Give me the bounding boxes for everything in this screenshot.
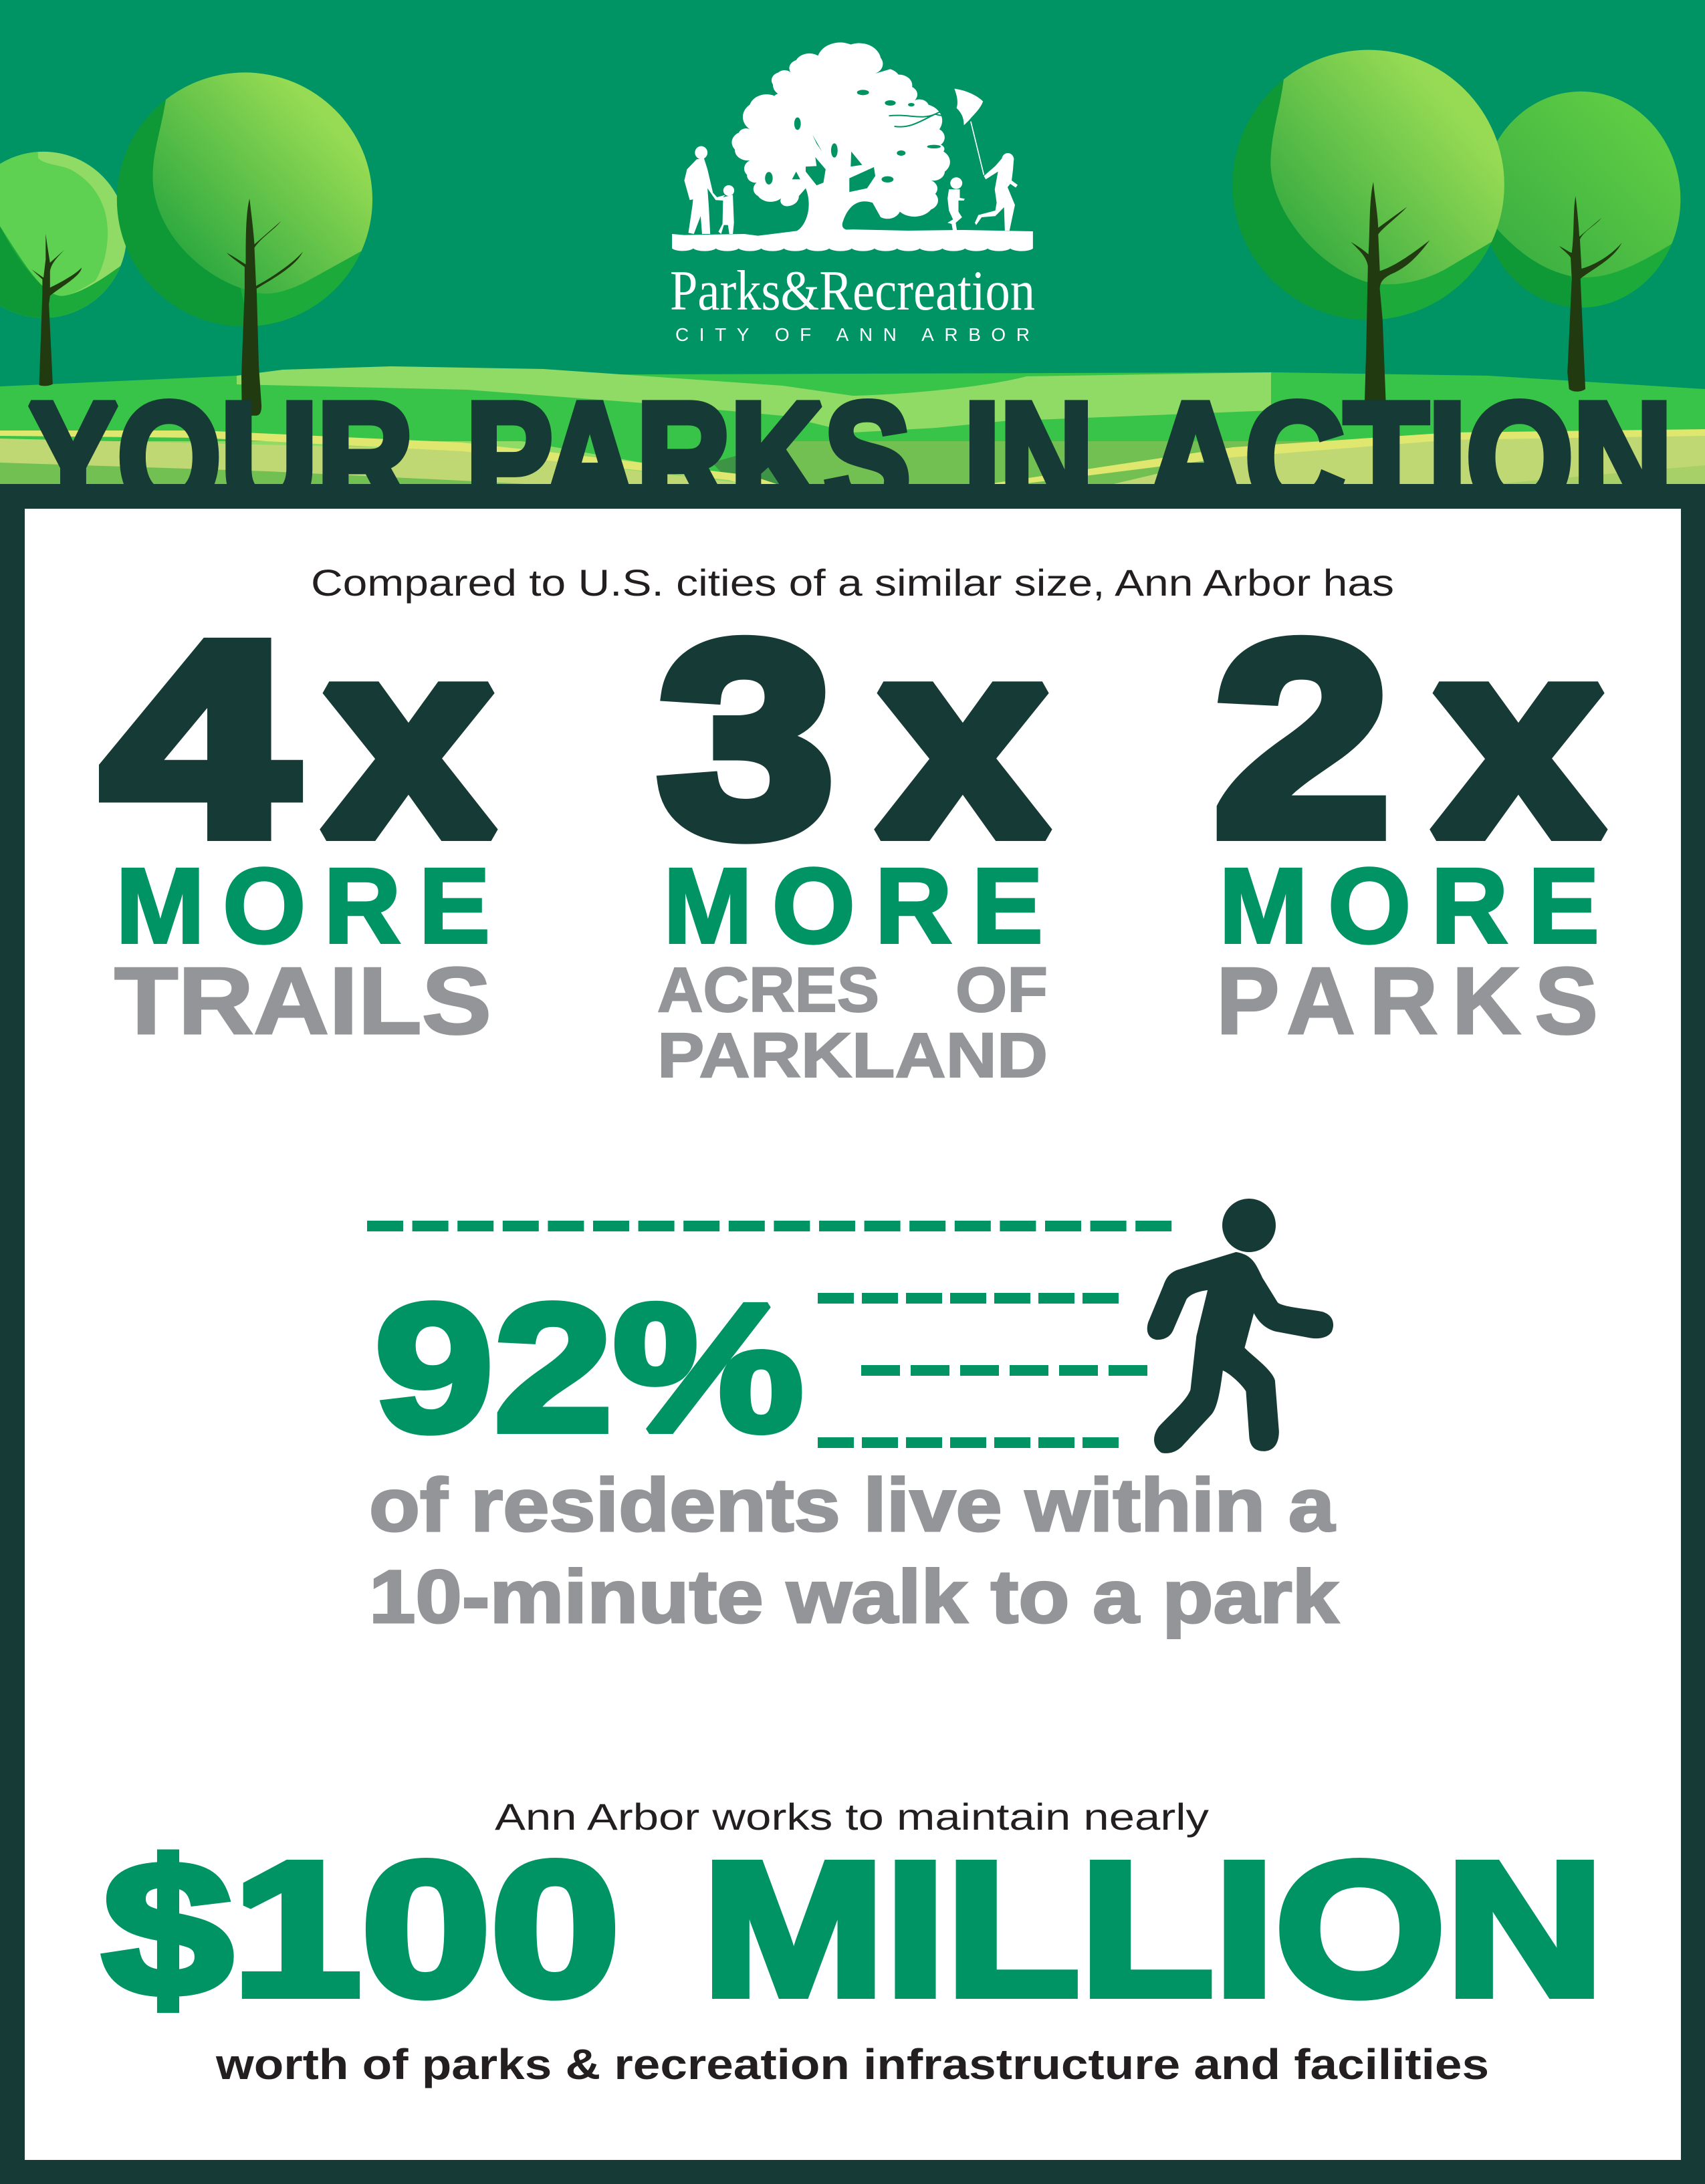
title <box>29 371 1672 544</box>
silhouette: kite <box>954 89 983 125</box>
big figure: $100 million: MILLION <box>702 1823 1604 2036</box>
title: IN <box>964 371 1093 544</box>
white panel <box>25 509 1681 2160</box>
closing text: worth of parks & recreation infrastructure and facilities <box>215 2040 1489 2088</box>
tree: small left <box>0 146 130 386</box>
word: trails: TRAILS <box>114 948 491 1054</box>
logo silhouette <box>672 43 1033 251</box>
number 2: 2 <box>1214 586 1390 892</box>
silhouette: tree gaps <box>765 90 941 192</box>
trunk <box>31 234 82 386</box>
number 4: 4 <box>103 586 298 892</box>
title: YOUR <box>29 371 413 544</box>
title: PARKS <box>466 371 911 544</box>
walking caption: of residents live within a <box>369 1463 1335 1547</box>
label: acres of parkland: ACRES <box>657 955 879 1025</box>
silhouette: ground <box>672 229 1033 251</box>
header background <box>0 0 1705 495</box>
trunk <box>1559 196 1622 392</box>
big number 92%: 92% <box>374 1266 804 1469</box>
letter x: x <box>324 586 495 892</box>
logo wordmark: Parks&Recreation <box>670 259 1035 322</box>
big figure: $100 million <box>103 1823 1604 2036</box>
letter x: x <box>1434 586 1605 892</box>
walking stat <box>367 1199 1339 1639</box>
silhouette: running child <box>950 177 962 189</box>
icon: walking person <box>1147 1199 1333 1453</box>
intro text: Compared to U.S. cities of a similar size, Ann Arbor has <box>311 562 1394 604</box>
big figure: $100 million: $100 <box>103 1823 620 2036</box>
walking caption <box>369 1463 1339 1639</box>
stat: 3x more acres of parkland <box>657 586 1050 1091</box>
dashed speed lines <box>367 1226 1172 1443</box>
label: acres of parkland: OF <box>955 955 1048 1025</box>
trees right <box>1228 43 1684 402</box>
tree: large left <box>114 66 380 416</box>
maintenance intro text: Ann Arbor works to maintain nearly <box>495 1796 1209 1838</box>
silhouette: man and child <box>695 146 707 159</box>
tree: large right <box>1228 43 1510 402</box>
stat: 2x more parks <box>1214 586 1605 1054</box>
stat: 4x more trails <box>103 586 495 1054</box>
letter x: x <box>879 586 1050 892</box>
number 3: 3 <box>659 586 834 892</box>
rolling hills landscape <box>0 366 1705 488</box>
trunk <box>1351 182 1430 402</box>
tree: far right <box>1478 86 1684 392</box>
walking caption: 10-minute walk to a park <box>369 1555 1339 1639</box>
label: acres of parkland <box>657 955 1048 1091</box>
trees left <box>0 66 380 416</box>
word: more: MORE <box>663 846 1043 965</box>
label: acres of parkland: PARKLAND <box>657 1020 1048 1091</box>
word: parks: PARKS <box>1216 948 1598 1054</box>
silhouette: tree <box>731 43 950 237</box>
word: more: MORE <box>1219 846 1599 965</box>
word: more: MORE <box>116 846 490 965</box>
trunk <box>227 199 303 416</box>
logo: Parks & Recreation, City of Ann Arbor <box>670 43 1035 345</box>
silhouette: kite tail <box>889 110 957 127</box>
dark frame <box>0 484 1705 2184</box>
logo subtitle: CITY OF ANN ARBOR <box>675 324 1030 345</box>
silhouette: girl with kite <box>1002 153 1014 166</box>
